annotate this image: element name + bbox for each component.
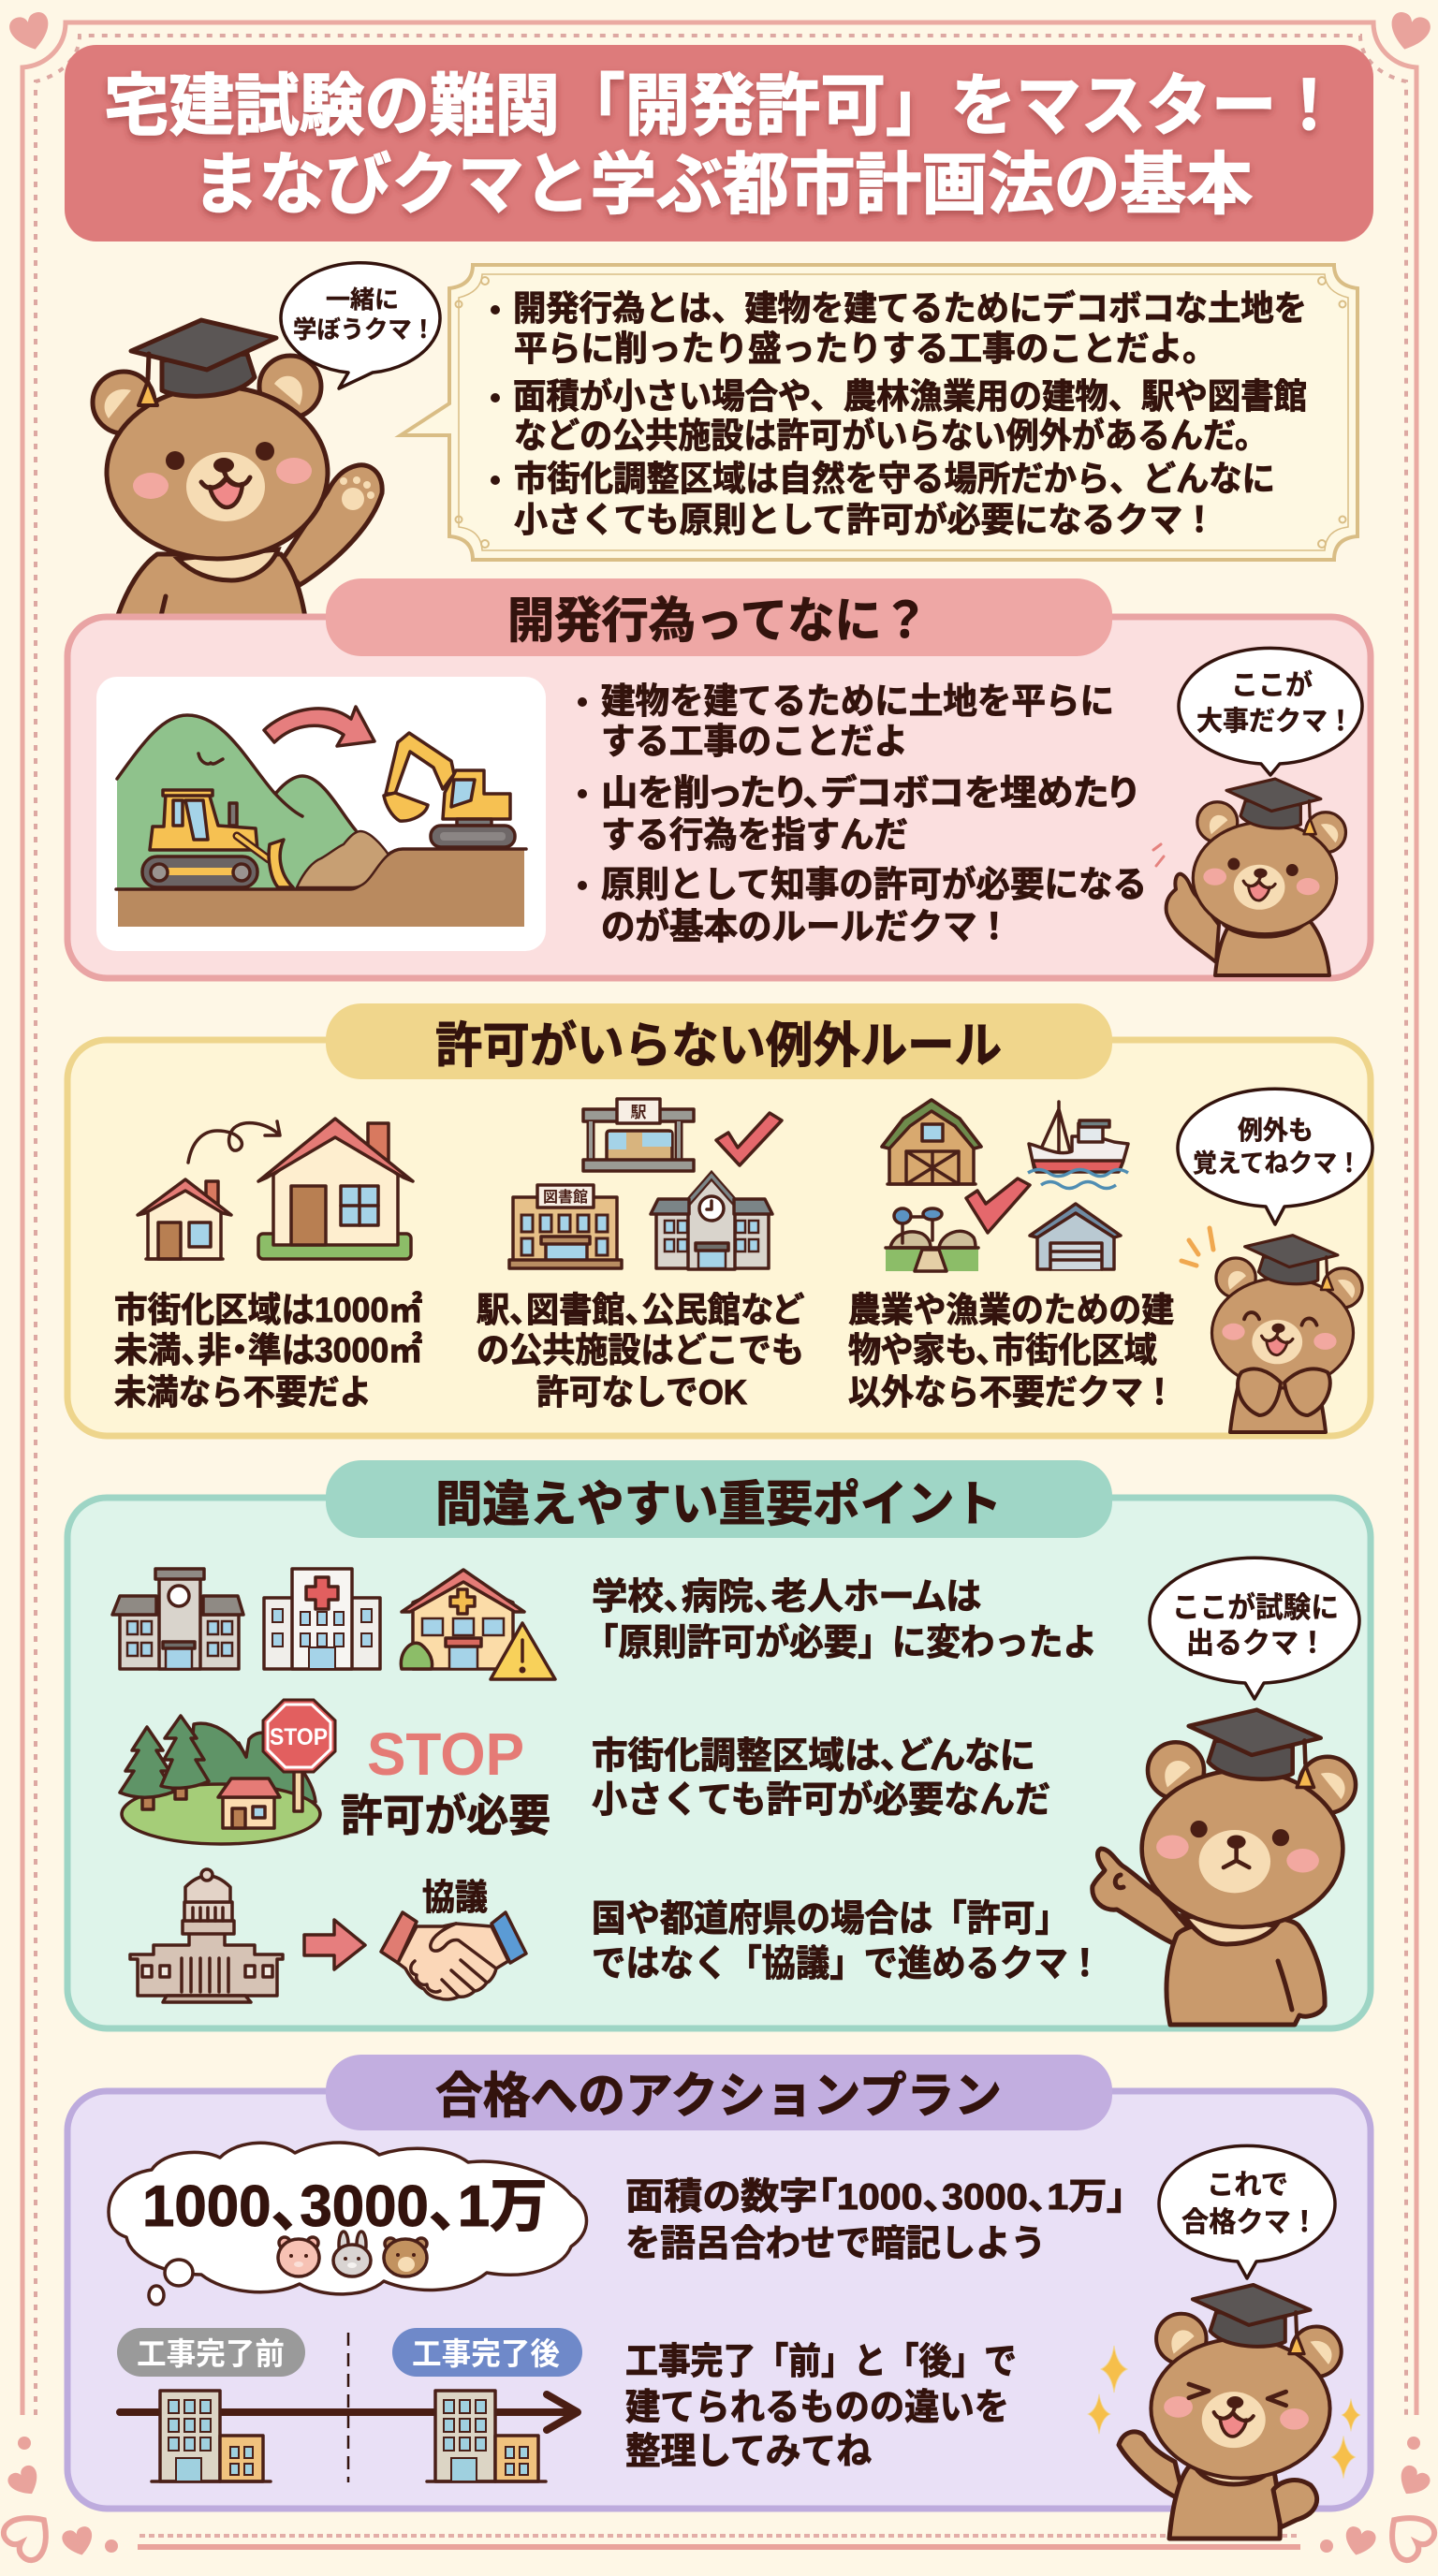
text block: 国や都道府県 (592, 1899, 1102, 1984)
text block: 工事完了: 工事完了「前」と「後」で (625, 2342, 1017, 2382)
icon: building after (427, 2391, 546, 2481)
heading pill: 開発行為 (326, 578, 1112, 656)
heading pill: 例外ルール (326, 1003, 1112, 1079)
text block: col 3: 以外なら不要だクマ！ (848, 1373, 1176, 1412)
intro callout box: 開発行為とは、建物を建てるためにデコボコな土地を (513, 288, 1307, 328)
icon: forest with stop sign (120, 1700, 335, 1844)
text block: col 2: 駅、図書館、公民館など (477, 1291, 804, 1329)
icon: barn, boat, field, warehouse with check (882, 1100, 1128, 1271)
text block: col 3: 農業や漁業のための建 (848, 1291, 1174, 1329)
text block: 工事完了 (625, 2342, 1017, 2472)
timeline: before and after completion (117, 2328, 582, 2482)
panel: 間違えやすい重要ポイント (67, 1460, 1371, 2028)
icon: station, library, school with check: 図書館 (543, 1188, 588, 1206)
text block: col 3: 物や家も、市街化区域 (848, 1331, 1157, 1369)
text block: col 1: 未満なら不要だよ (114, 1373, 372, 1412)
heading pill: 開発行為: 開発行為ってなに？ (507, 594, 929, 649)
icon: building before (152, 2391, 271, 2481)
icon: small bear (384, 2238, 427, 2276)
text block: 国や都道府県: 国や都道府県の場合は「許可」 (592, 1899, 1069, 1939)
text block: 開発行為 bullets: する工事のことだよ (601, 723, 908, 762)
speech bubble: これで合格クマ: これで (1207, 2170, 1288, 2201)
bear: pointing with serious face (1093, 1710, 1356, 2025)
text block: 開発行為 bullets: 山を削ったり、デコボコを埋めたり (601, 773, 1137, 813)
icon: pig (278, 2237, 319, 2276)
pill: 工事完了後: 工事完了後 (412, 2336, 560, 2371)
speech bubble: 例外も覚えてねクマ: 覚えてねクマ！ (1193, 1149, 1361, 1178)
speech bubble: これで合格クマ: 合格クマ！ (1181, 2207, 1318, 2238)
text block: 面積の数字 (625, 2177, 1126, 2264)
bear: hands together (1181, 1228, 1362, 1432)
text block: 工事完了: 建てられるものの違いを (625, 2388, 1009, 2428)
panel: 許可がいらない例外ルール (67, 1003, 1372, 1436)
speech bubble: ここが試験に出るクマ (1150, 1558, 1359, 1699)
speech bubble: ここが大事だクマ: 大事だクマ！ (1196, 706, 1354, 737)
bear: cheering (1088, 2285, 1360, 2539)
text block: 開発行為 bullets: する行為を指すんだ (601, 816, 908, 856)
text block: 開発行為 bullets: のが基本のルールだクマ！ (601, 908, 1011, 947)
heading pill: 重要ポイント: 間違えやすい重要ポイント (435, 1478, 1002, 1532)
text block: 市街化調整区域 (592, 1736, 1050, 1821)
heading pill: 例外ルール: 許可がいらない例外ルール (435, 1019, 1002, 1074)
heading pill: 重要ポイント (326, 1460, 1112, 1538)
arrow: to consultation (304, 1920, 365, 1969)
text block: col 1: 市街化区域は1000㎡ (114, 1290, 422, 1329)
intro callout box: 面積が小さい場合や、農林漁業用の建物、駅や図書館 (513, 377, 1307, 416)
text block: 開発行為 bullets: 原則として知事の許可が必要になる (601, 866, 1147, 905)
text block: 学校 (584, 1577, 1097, 1663)
text block: 工事完了: 整理してみてね (625, 2432, 872, 2472)
label: 許可が必要: 許可が必要 (341, 1791, 550, 1840)
heading pill: アクションプラン (326, 2055, 1112, 2130)
intro callout box: 小さくても原則として許可が必要になるクマ！ (514, 501, 1216, 539)
text block: col 1: 未満、非・準は3000㎡ (114, 1330, 422, 1369)
icon: small to large house (138, 1119, 413, 1259)
text block: 市街化調整区域: 小さくても許可が必要なんだ (592, 1780, 1050, 1821)
intro callout box: 平らに削ったり盛ったりする工事のことだよ。 (514, 329, 1216, 368)
thought cloud: 1000、3000、1万: 1000、3000、1万 (142, 2174, 548, 2239)
speech bubble: 一緒に学ぼうクマ: 一緒に (326, 285, 399, 314)
bear: waving with cap (93, 320, 382, 618)
text block: 市街化調整区域: 市街化調整区域は、どんなに (592, 1736, 1034, 1777)
speech bubble: ここが大事だクマ (1179, 648, 1362, 775)
intro callout box: などの公共施設は許可がいらない例外があるんだ。 (514, 417, 1268, 455)
text block: 国や都道府県: ではなく「協議」で進めるクマ！ (592, 1944, 1102, 1984)
construction scene illustration (96, 677, 546, 951)
speech bubble: ここが大事だクマ: ここが (1231, 669, 1313, 701)
text block: 面積の数字: を語呂合わせで暗記しよう (625, 2224, 1046, 2264)
text block: col 3 (848, 1291, 1176, 1412)
pill: 工事完了前: 工事完了前 (137, 2336, 285, 2371)
text block: 開発行為 bullets (578, 682, 1147, 947)
text block: col 2 (477, 1291, 804, 1412)
icon: station, library, school with check: 駅 (631, 1104, 646, 1121)
speech bubble: これで合格クマ (1159, 2145, 1335, 2278)
speech bubble: ここが試験に出るクマ: 出るクマ！ (1186, 1627, 1327, 1660)
thought cloud: 1000、3000、1万 (109, 2143, 586, 2305)
text block: 学校: 「原則許可が必要」に変わったよ (584, 1623, 1097, 1663)
bear: pointing up (1153, 779, 1345, 975)
icon: rabbit (333, 2232, 371, 2276)
title banner (65, 45, 1373, 242)
STOP label: STOP (367, 1720, 524, 1788)
text block: 学校: 学校、病院、老人ホームは (592, 1577, 981, 1617)
intro callout box: 市街化調整区域は自然を守る場所だから、どんなに (514, 460, 1275, 498)
panel: 合格へのアクションプラン (67, 2055, 1371, 2539)
pill: 工事完了前 (117, 2328, 305, 2377)
text block: 開発行為 bullets: 建物を建てるために土地を平らに (601, 682, 1114, 722)
pill: 工事完了後 (392, 2328, 582, 2377)
arrow: timeline (120, 2394, 578, 2430)
intro callout box (401, 265, 1357, 560)
text block: col 2: の公共施設はどこでも (477, 1331, 804, 1369)
icon: national diet building (130, 1869, 283, 2002)
panel: 開発行為ってなに (67, 578, 1371, 978)
title banner: 宅建試験の難関「開発許可」をマスター！ (104, 69, 1342, 144)
heading pill: アクションプラン: 合格へのアクションプラン (435, 2070, 1002, 2124)
speech bubble: 一緒に学ぼうクマ: 学ぼうクマ！ (293, 315, 435, 344)
icon: station, library, school with check (509, 1099, 782, 1269)
icon: handshake with 協議 label (381, 1879, 526, 1999)
text block: col 1 (114, 1290, 422, 1412)
icon: forest with stop sign: STOP (270, 1724, 328, 1750)
icon: handshake with 協議 label: 協議 (422, 1879, 488, 1918)
text block: 面積の数字: 面積の数字「1000、3000、1万」 (625, 2177, 1126, 2217)
speech bubble: ここが試験に出るクマ: ここが試験に (1172, 1591, 1339, 1624)
text block: col 2: 許可なしでOK (536, 1373, 747, 1412)
speech bubble: 一緒に学ぼうクマ (281, 263, 440, 388)
speech bubble: 例外も覚えてねクマ: 例外も (1238, 1116, 1313, 1145)
icon: school, hospital, care home (112, 1569, 555, 1679)
speech bubble: 例外も覚えてねクマ (1178, 1089, 1372, 1224)
title banner: まなびクマと学ぶ都市計画法の基本 (193, 148, 1253, 223)
